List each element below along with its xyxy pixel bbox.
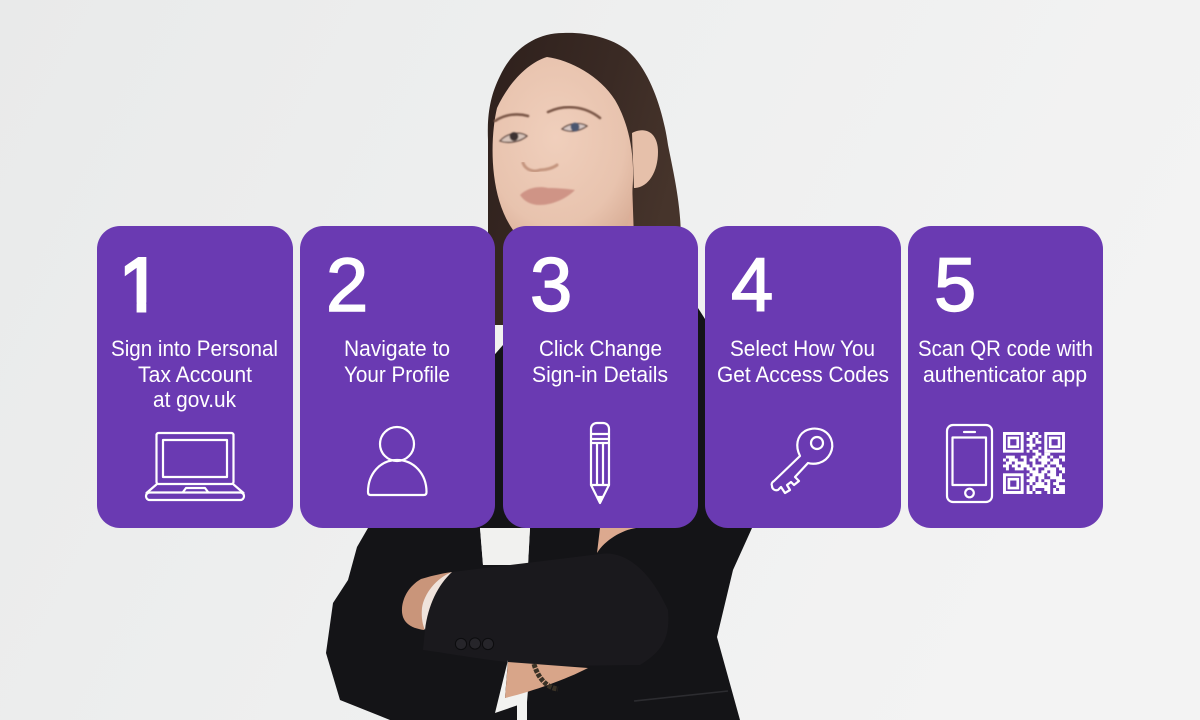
- photo: woman in black blazer with crossed arms: [326, 33, 752, 720]
- icon: QR code: [1003, 433, 1065, 492]
- step text 5: authenticator app: [923, 362, 1087, 387]
- step text 5: Scan QR code with: [918, 336, 1093, 361]
- eyes: [500, 123, 587, 142]
- icon: key: [772, 429, 832, 493]
- step text 3: [532, 336, 668, 387]
- icon: pencil: [591, 423, 609, 503]
- digit foot mask: [110, 302, 170, 315]
- folded forearm sleeve: [423, 553, 668, 666]
- step text 2: Your Profile: [344, 362, 450, 387]
- step text 2: Navigate to: [344, 336, 450, 361]
- step number 5: 5: [934, 243, 976, 328]
- card 1: sign in: [97, 226, 293, 528]
- raised hand: [597, 528, 636, 553]
- card 5: QR code: [908, 226, 1103, 528]
- step text 2: [344, 336, 450, 387]
- step text 1: Tax Account: [138, 362, 253, 387]
- lower shirt cuff: [495, 660, 528, 713]
- step text 5: [918, 336, 1093, 387]
- lips: [520, 187, 575, 205]
- blouse opening: [480, 528, 530, 565]
- step number 4: 4: [731, 243, 773, 328]
- card 3: change sign-in details: [503, 226, 698, 528]
- nose: [523, 163, 557, 171]
- icon: smartphone: [947, 425, 992, 502]
- icon: person: [368, 427, 426, 495]
- eyebrows: [495, 107, 600, 121]
- step text 3: Sign-in Details: [532, 362, 668, 387]
- ear: [632, 130, 658, 188]
- left hand: [402, 572, 452, 630]
- step text 3: Click Change: [539, 336, 662, 361]
- face: [493, 57, 633, 236]
- neck: [518, 180, 634, 240]
- step text 1: Sign into Personal: [111, 336, 278, 361]
- lower shirt hem: [517, 700, 527, 720]
- blazer pocket line: [634, 691, 728, 701]
- step text 4: [717, 336, 889, 387]
- step number 3: 3: [530, 243, 572, 328]
- step text 1: [111, 336, 278, 412]
- step number 2: 2: [326, 243, 368, 328]
- lower wrist: [505, 662, 588, 698]
- bracelet: [534, 664, 558, 689]
- hair: [488, 33, 681, 325]
- icon: laptop: [146, 433, 244, 500]
- step text 4: Get Access Codes: [717, 362, 889, 387]
- blazer: [326, 308, 752, 720]
- step number 1: 1: [119, 243, 161, 328]
- left shirt cuff: [422, 572, 452, 630]
- card 2: profile: [300, 226, 495, 528]
- sleeve buttons: [455, 638, 494, 650]
- step text 1: at gov.uk: [153, 387, 237, 412]
- white blouse behind cards: [470, 325, 540, 580]
- card 4: access codes: [705, 226, 901, 528]
- step text 4: Select How You: [730, 336, 875, 361]
